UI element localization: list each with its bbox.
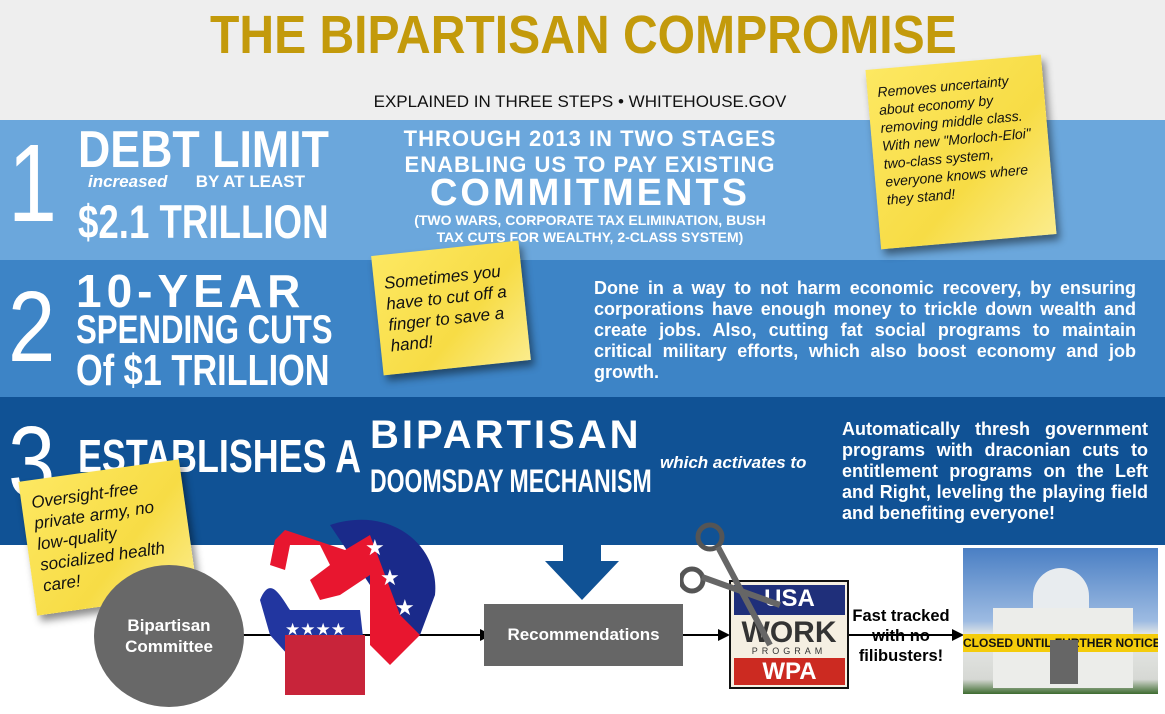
sticky note: removes uncertainty: Removes uncertainty about economy by removing middle class. With new "Morloch-Eloi" two-class system, everyone knows where they stand! (877, 73, 1031, 208)
heading: spending cuts: SPENDING CUTS (76, 308, 333, 352)
photo: closed capitol: CLOSED UNTIL FURTHER NOTICE (963, 636, 1158, 650)
icon: WPA poster with scissors (729, 580, 849, 689)
text block: commitments: COMMITMENTS (430, 172, 750, 214)
arrow: down to recommendations (545, 545, 619, 600)
text block: commitments: ENABLING US TO PAY EXISTING (405, 152, 775, 177)
heading: debt limit: DEBT LIMIT (78, 121, 329, 179)
heading: 10-year: 10-YEAR (76, 265, 305, 317)
text: fast tracked: filibusters! (859, 647, 943, 665)
heading: bipartisan: BIPARTISAN (370, 413, 641, 457)
icon: donkey and elephant (260, 520, 436, 695)
sticky note: removes uncertainty (865, 55, 1057, 249)
text: fast tracked: with no (872, 627, 930, 645)
icon: donkey and elephant: ★ (395, 595, 415, 620)
number 2: 2 (8, 271, 55, 383)
icon: WPA poster with scissors: WORK (742, 616, 836, 649)
number 3: 3 (8, 406, 55, 518)
text: which activates to: which activates to (660, 453, 806, 472)
icon: donkey and elephant: ★ (365, 535, 385, 560)
sticky note: oversight-free: Oversight-free private army, no low-quality socialized health care! (30, 478, 166, 595)
panel: step 3 (0, 397, 1165, 545)
box: recommendations (484, 604, 683, 666)
amount: $2.1 TRILLION (78, 195, 329, 248)
icon: donkey and elephant: ★ (380, 565, 400, 590)
text: increased by at least: increased BY AT LEAST (88, 172, 305, 191)
text block: done in a way: Done in a way to not harm economic recovery, by ensuring corporations have enough money to trickle down wealth and create jobs. Also, cutting fat social programs to maintain critical military efforts, which also boost economy and job growth. (594, 278, 1136, 382)
icon: WPA poster with scissors: USA (764, 585, 815, 612)
circle: bipartisan committee: Committee (125, 637, 213, 656)
subtitle: EXPLAINED IN THREE STEPS • WHITEHOUSE.GOV (374, 92, 786, 111)
circle: bipartisan committee: Bipartisan (127, 616, 211, 635)
amount: Of $1 TRILLION (76, 346, 330, 395)
sticky note: oversight-free (18, 459, 198, 616)
box: recommendations: Recommendations (507, 625, 660, 644)
text: fast tracked (852, 607, 950, 665)
sticky note: cut off a finger (371, 241, 531, 375)
header background (0, 0, 1165, 120)
circle: bipartisan committee (94, 565, 244, 707)
heading: establishes a: ESTABLISHES A (78, 430, 361, 482)
panel: step 2 (0, 260, 1165, 397)
sticky note: cut off a finger: Sometimes you have to cut off a finger to save a hand! (383, 262, 508, 355)
icon: scissors (680, 522, 781, 646)
icon: WPA poster with scissors: PROGRAM (752, 646, 826, 656)
photo: closed capitol (963, 548, 1158, 694)
icon: donkey and elephant: ★★★★ (285, 620, 346, 639)
text block: automatically thresh: Automatically thresh government programs with draconian cuts to entitlement programs on the Left and Right, leveling the playing field and benefiting everyone! (842, 419, 1148, 523)
icon: WPA poster with scissors: WPA (762, 658, 817, 685)
panel: step 1 (0, 120, 1165, 260)
flow line and arrows (244, 629, 963, 641)
text block: commitments: (TWO WARS, CORPORATE TAX ELIMINATION, BUSH (414, 212, 766, 228)
text block: commitments: TAX CUTS FOR WEALTHY, 2-CLASS SYSTEM) (437, 229, 743, 245)
text block: commitments (404, 126, 776, 245)
text: fast tracked: Fast tracked (852, 607, 950, 625)
title: THE BIPARTISAN COMPROMISE (210, 5, 957, 65)
heading: doomsday mechanism: DOOMSDAY MECHANISM (370, 463, 652, 499)
number 1: 1 (8, 122, 57, 245)
text block: commitments: THROUGH 2013 IN TWO STAGES (404, 126, 776, 151)
